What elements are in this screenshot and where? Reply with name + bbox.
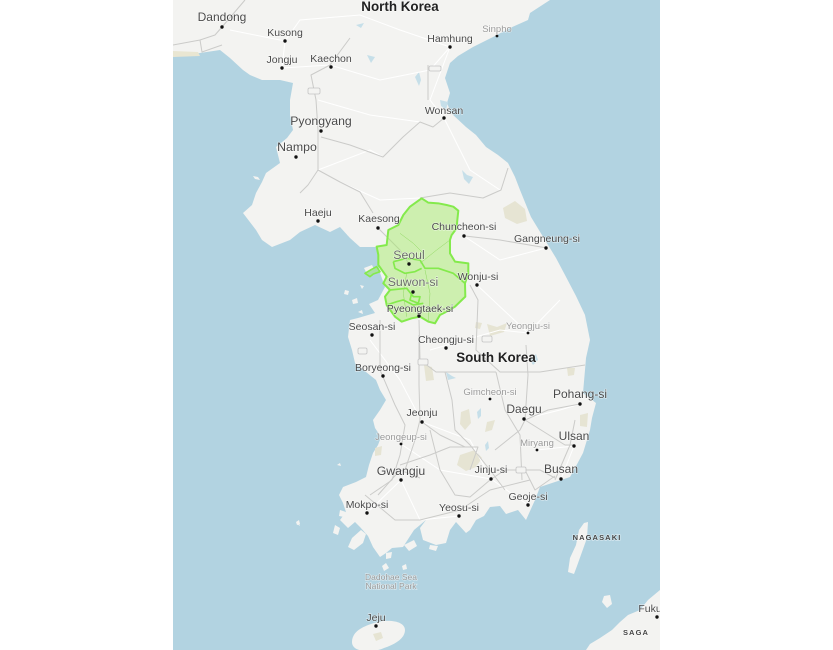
land: Korean peninsula (173, 0, 596, 557)
small city labels: Jongju (267, 54, 298, 66)
small city labels: Kaechon (310, 53, 352, 65)
large city labels: Pyongyang (290, 114, 352, 128)
sea (173, 0, 660, 650)
faded city labels: National Park (365, 581, 417, 591)
small city labels: Gangneung-si (514, 233, 580, 245)
small city labels: Pyeongtaek-si (387, 303, 453, 315)
small city labels: Yeosu-si (439, 502, 479, 514)
small city labels: Haeju (304, 207, 332, 219)
small city labels: Chuncheon-si (432, 221, 496, 233)
land: Kyushu (586, 590, 660, 650)
roads: major (173, 0, 585, 520)
small city labels: Boryeong-si (355, 362, 411, 374)
land: small islands (250, 176, 438, 571)
city dots (220, 25, 659, 628)
small city labels: Geoje-si (508, 491, 548, 503)
faded city labels: Gimcheon-si (463, 387, 517, 398)
small city labels: Jeju (366, 612, 386, 624)
sand patch (173, 51, 200, 57)
medium city labels: Pohang-si (553, 387, 607, 401)
country labels: South Korea (456, 350, 536, 365)
large city labels: Seoul (393, 248, 425, 262)
map frame (173, 0, 662, 650)
small city labels: Jeonju (407, 407, 438, 419)
highlighted region: Gyeonggi province (365, 198, 468, 323)
small city labels: Kusong (267, 27, 303, 39)
small city labels: Kaesong (358, 213, 400, 225)
small city labels: Wonsan (425, 105, 463, 117)
Japanese prefecture labels: SAGA (623, 628, 649, 637)
large city labels (277, 114, 438, 478)
western islet (365, 267, 380, 277)
faded city labels: Miryang (520, 438, 554, 449)
faded city labels: Dadohae Sea (365, 572, 417, 582)
faded city labels: Jeongeup-si (375, 432, 427, 443)
small city labels: Jinju-si (475, 464, 507, 476)
small city labels: Wonju-si (458, 271, 498, 283)
small city labels: Seosan-si (349, 321, 395, 333)
land: Jeju island (352, 621, 405, 650)
roads: minor (230, 15, 580, 520)
large city labels: Suwon-si (388, 275, 438, 289)
faded city labels: Yeongju-si (506, 321, 550, 332)
province fill and outer boundary (377, 198, 468, 323)
faded city labels (365, 24, 554, 591)
Japanese prefecture labels (573, 533, 649, 637)
small city labels: Hamhung (427, 33, 473, 45)
medium city labels: Dandong (198, 10, 246, 24)
land: Iki island (602, 595, 612, 608)
medium city labels: Busan (544, 462, 578, 476)
faded city labels: Sinpho (482, 24, 512, 35)
Japanese prefecture labels: NAGASAKI (573, 533, 621, 542)
medium city labels: Daegu (506, 402, 542, 416)
land: Tsushima (568, 522, 588, 574)
map (173, 0, 660, 650)
terrain patches (373, 201, 588, 641)
large city labels: Gwangju (377, 464, 425, 478)
large city labels: Nampo (277, 140, 317, 154)
small city labels: Cheongju-si (418, 334, 474, 346)
road shields (308, 66, 526, 473)
country labels (361, 0, 536, 365)
medium city labels (198, 10, 607, 476)
small city labels (267, 27, 662, 624)
small city labels: Fuku (638, 603, 662, 615)
inner municipal boundaries (387, 258, 465, 305)
small city labels: Mokpo-si (346, 499, 388, 511)
lakes and rivers (356, 23, 538, 451)
medium city labels: Ulsan (559, 429, 589, 443)
